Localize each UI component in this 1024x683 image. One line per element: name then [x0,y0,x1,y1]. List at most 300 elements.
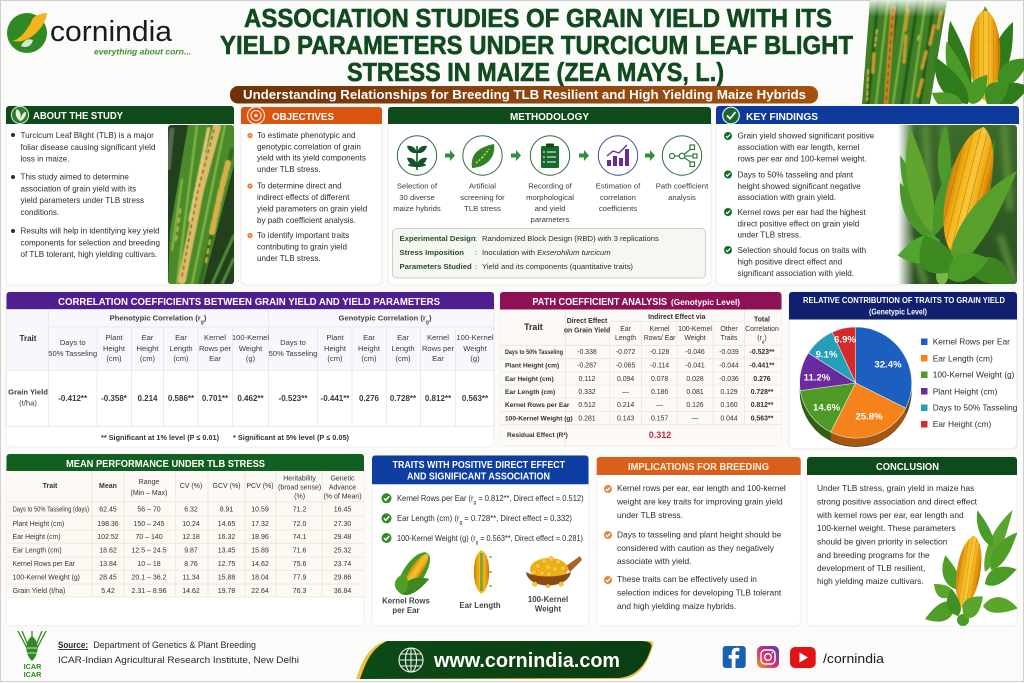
table: mean performance: 36.84 [334,588,351,595]
table: mean performance: CV (%) [180,483,202,490]
social links: /cornindia [823,651,885,666]
table: mean performance: Kernel Rows per Ear [13,561,76,568]
list: positive traits: Kernel Rows per Ear (rg = 0.812**, Direct effect = 0.512) [397,494,584,506]
legend: Ear Length (cm) [933,353,993,363]
table: mean performance: 14.65 [218,521,235,528]
text: implications bullets: considered with caution as they negatively [617,543,775,553]
arrow [445,150,455,161]
text: methodology step labels: Recording of [528,182,573,191]
text: conclusion: Under TLB stress, grain yield in maize has [817,483,974,493]
text: about bullets: yield parameters under TLB stress [20,196,144,205]
text: methodology step labels: TLB stress [464,204,501,213]
heading: key findings [716,106,1019,124]
panel: conclusion [807,457,1022,628]
heading: methodology [388,107,711,124]
table: correlation values: Days to [280,338,306,347]
pie chart: 11.2% [804,372,831,384]
table: correlation values: 100-Kernel [232,333,269,342]
image: blighted leaf [168,125,234,284]
table: correlation values: Rows per [199,344,232,353]
source text [58,639,299,665]
pie chart [800,327,912,447]
text: conclusion: with kernel rows per ear, ear length and [816,510,964,520]
text: about bullets: components for selection and breeding [20,238,160,248]
table: mean performance: 29.48 [334,534,351,541]
table: path coefficients: -0.072 [616,349,636,356]
table: mean performance: 16.32 [218,534,235,541]
table: correlation values: (cm) [395,354,411,363]
text: key findings bullets: association with ear length, kernel [738,143,860,152]
text: objectives bullets: To estimate phenotypic and [257,131,356,140]
text: about bullets: loss in maize. [20,154,70,164]
text: implications bullets: Kernel rows per ear, ear length and 100-kernel [617,483,786,493]
table: mean performance: 25.32 [334,548,351,554]
heading: about the study [6,106,234,124]
info box: experimental details: Randomized Block Design (RBD) with 3 replications [482,234,659,243]
arrow [511,150,521,161]
labels: trait icons: Ear Length [459,601,501,610]
icon: instagram [757,646,779,668]
table: path coefficients: Indirect Effect via [648,314,706,321]
heading: about the study: ABOUT THE STUDY [33,110,123,122]
text: key findings bullets: association with grain yield. [738,193,836,202]
list: positive traits: 100-Kernel Weight (g) (rg = 0.563**, Direct effect = 0.281) [397,534,583,546]
labels: trait icons: Weight [535,604,561,614]
table: correlation values: (t/ha) [19,398,37,408]
table: path coefficients: Total [754,316,770,324]
table: correlation values: 0.586** [168,394,195,403]
legend: Kernel Rows per Ear [933,337,1010,347]
table: correlation values: (cm) [140,354,156,363]
table: path coefficients: Other [720,326,738,333]
table: path coefficients: 0.312 [649,430,671,440]
text: conclusion [816,483,978,586]
table: path coefficients: 0.332 [578,389,596,396]
labels: trait icons: per Ear [392,606,420,615]
title: ASSOCIATION STUDIES OF GRAIN YIELD WITH ITS [244,5,832,33]
text: methodology step labels: screening for [460,193,505,202]
table: correlation values: Rows per [422,344,455,353]
text: about bullets: of TLB tolerant, high yielding cultivars. [20,250,157,259]
table: mean performance: Advance [329,484,356,492]
arrow [645,150,655,161]
text: methodology step labels: Path coefficient [656,182,709,191]
table: path coefficients: 0.081 [686,389,704,396]
text: about bullets: Turcicum Leaf Blight (TLB) is a major [20,131,154,140]
text: implications bullets: Days to tasseling and plant height should be [617,530,782,540]
panel: objectives [241,106,382,285]
panel: methodology [388,107,711,285]
heading: correlation coefficients: CORRELATION COEFFICIENTS BETWEEN GRAIN YIELD AND YIELD PARAMETERS [58,296,440,308]
logo: ICAR [18,631,46,679]
table: correlation values: Height [103,344,126,353]
table: path coefficients: 0.563** [751,416,774,422]
text: objectives bullets: yield with its yield components [257,154,366,162]
text: about bullets [11,131,160,259]
image: maize cob in field [898,125,1017,284]
table: mean performance: 14.62 [251,561,269,568]
table: correlation values: (cm) [327,354,343,363]
table: path coefficients: -0.287 [577,362,597,370]
table: path coefficients: — [692,416,699,422]
info box: experimental details: Stress Imposition [400,248,464,257]
subtitle banner: Understanding Relationships for Breeding TLB Resilient and High Yielding Maize Hybrids [243,87,806,102]
table: mean performance: 8.91 [220,507,233,514]
table: correlation values: 50% Tasseling [48,349,97,358]
table: path coefficients: Weight [684,335,706,342]
text: methodology step labels: coefficients [599,204,637,213]
heading: path coefficient analysis: PATH COEFFICIENT ANALYSIS [532,296,667,308]
legend: 100-Kernel Weight (g) [933,370,1015,380]
heading: implications [597,457,801,475]
text: objectives bullets: under TLB stress. [257,165,321,174]
table: correlation values: Height [324,344,347,353]
image: maize plant [925,510,1017,626]
text: conclusion: and breeding programs for the [817,550,930,560]
table: correlation values: Days to [60,338,86,347]
table: path coefficients: 0.276 [753,376,771,383]
heading: key findings: KEY FINDINGS [746,111,818,123]
table: path coefficients: 0.129 [720,389,738,396]
table: path coefficients: 0.186 [651,389,668,396]
table: correlation values: Length [169,344,193,353]
heading: relative contribution: RELATIVE CONTRIBUTION OF TRAITS TO GRAIN YIELD [803,295,1005,305]
text: methodology step labels: analysis [668,193,696,202]
heading: objectives: OBJECTIVES [272,111,334,123]
legend [921,337,1018,429]
table: path coefficients: 0.214 [617,402,634,409]
text: conclusion: high yielding maize cultivars. [817,576,924,586]
heading: mean performance [6,454,364,471]
text: methodology step labels: 30 diverse [399,193,435,202]
info box: experimental details: : [475,262,477,271]
table: correlation values: -0.523** [279,394,308,403]
website banner [356,641,653,679]
heading: path coefficient analysis: (Genotypic Level) [671,297,740,307]
table: path coefficients: Ear Height (cm) [505,376,554,383]
logo: ICAR: ICAR [24,670,42,679]
table: mean performance: GCV (%) [212,483,240,490]
table: correlation values: Grain Yield [8,388,48,396]
table: mean performance: Range [139,479,159,486]
text: key findings bullets: Grain yield showed significant positive [738,132,875,141]
heading: relative contribution: (Genetypic Level) [869,306,927,316]
table: mean performance: 12.18 [182,534,200,541]
table: path coefficients: -0.046 [685,349,705,356]
table: mean performance: 10 – 18 [137,561,161,568]
table: mean performance: 13.45 [218,548,235,554]
heading: mean performance: MEAN PERFORMANCE UNDER TLB STRESS [66,458,265,470]
table: path coefficients: Ear [620,326,632,333]
table: mean performance: 29.86 [334,574,351,582]
logo: cornindia: cornindia [50,16,172,48]
table: mean performance: 2.31 – 8.96 [131,588,167,595]
panel: path coefficient analysis [500,292,782,446]
panel: traits with positive direct effect [372,456,588,626]
table: path coefficients: Trait [524,322,543,332]
list: positive traits: Ear Length (cm) (rg = 0.728**, Direct effect = 0.332) [397,514,572,526]
text: implications bullets [604,483,786,611]
table: mean performance: 12.75 [218,561,235,568]
heading: correlation coefficients [6,292,494,310]
table: mean performance: Ear Length (cm) [13,548,62,554]
table: correlation values: Weight [463,344,488,353]
table: path coefficients: Ear Length (cm) [505,389,555,396]
table: mean performance: 5.42 [101,588,115,595]
table: path coefficients: 0.281 [578,416,596,422]
heading: relative contribution [789,292,1017,320]
table: mean performance: 56 – 70 [137,507,161,514]
table: mean performance: Plant Height (cm) [13,521,64,528]
table: path coefficients: 0.512 [578,402,596,409]
text: conclusion: development of TLB resilient, [817,563,925,573]
table: path coefficients: Kernel Rows per Ear [505,402,570,409]
labels: trait icons: 100-Kernel [528,595,568,604]
table: correlation values: (cm) [173,354,189,363]
table: mean performance: 9.87 [184,548,198,554]
table: path coefficients: 0.078 [651,376,668,383]
table: mean performance: 100-Kernel Weight (g) [13,574,80,582]
table: path coefficients: (rg) [757,335,767,344]
table: mean performance: (broad sense) [278,484,321,492]
table: path coefficients: 0.044 [720,416,738,422]
text: objectives bullets: by path coefficient analysis. [257,216,356,225]
table: path coefficients: Length [615,335,636,342]
image: maize cob header [932,6,1024,104]
table: path coefficients: 0.812** [751,402,774,409]
text: methodology step labels: Artificial [469,182,496,191]
text: methodology step labels: morphological [526,193,574,202]
table: path coefficients: -0.044 [719,362,739,370]
heading: conclusion [807,457,1017,475]
table: mean performance: 28.45 [99,574,117,582]
info box: experimental details: Yield and its components (quantitative traits) [482,262,633,271]
table: correlation values: Ear [175,333,187,342]
text: implications bullets: and high yielding maize hybrids. [617,601,736,611]
text: methodology step labels: Selection of [397,182,438,191]
text: about bullets: conditions. [20,208,59,217]
table: mean performance: 15.88 [218,574,235,582]
info box: experimental details [392,228,706,278]
text: implications bullets: These traits can be effectively used in [617,574,757,584]
table: path coefficients: 0.157 [651,416,668,422]
table: mean performance: 6.32 [184,507,198,514]
pie chart: 32.4% [874,360,902,370]
text: objectives bullets: To determine direct and [257,182,342,190]
table: mean performance: 8.76 [184,561,198,568]
text: objectives bullets: contributing to grain yield [257,242,347,252]
icon: ear length cob [474,550,492,594]
icon: globe [399,648,423,672]
table: mean performance: Grain Yield (t/ha) [13,588,65,595]
table: path coefficients: on Grain Yield [564,328,610,334]
logo: cornindia [7,13,191,56]
logo: cornindia: everything about corn... [94,46,191,56]
table: mean performance: Days to 50% Tasseling (days) [13,507,89,514]
legend: Days to 50% Tasseling [933,403,1018,413]
text: key findings bullets: under TLB stress. [738,230,801,240]
table: path coefficients: Days to 50% Tasseling [505,349,563,356]
text: about bullets: association of grain yield with its [20,184,136,194]
table: path coefficients: -0.128 [650,349,670,356]
table: path coefficients: -0.114 [650,362,669,370]
text: about bullets: This study aimed to determine [20,172,129,182]
heading: conclusion: CONCLUSION [876,461,939,473]
website banner: www.cornindia.com [433,650,620,672]
table: mean performance: 23.74 [334,561,351,568]
text: methodology step labels [393,182,709,224]
table: correlation values: Kernel [427,333,449,342]
table: correlation values: (g) [470,354,480,363]
logo: ICAR: ICAR [24,662,42,671]
panel: implications for breeding [597,457,801,626]
table: mean performance: 27.30 [334,521,351,528]
table: correlation values: Ear [432,354,444,363]
table: mean performance: 14.62 [182,588,200,595]
table: mean performance: Ear Height (cm) [13,534,61,541]
table: mean performance: 22.64 [251,588,269,595]
table: correlation values: Weight [239,344,263,353]
text: methodology step labels: maize hybrids [393,204,441,213]
table: path coefficients: — [656,402,663,409]
table: path coefficients: Traits [721,335,738,342]
heading: traits: AND SIGNIFICANT ASSOCIATION [407,470,550,482]
table: correlation values: Phenotypic Correlation (rg) [110,314,207,326]
panel: key findings [716,106,1024,293]
table: mean performance: 150 – 245 [133,521,165,528]
icon: correlation chart [598,136,638,175]
table: mean performance: 70 – 140 [135,534,163,541]
table: mean performance: 75.6 [293,561,307,568]
source text: Department of Genetics & Plant Breeding [93,639,256,650]
table: mean performance: 18.62 [99,548,117,554]
table: correlation values: Plant [326,333,345,342]
icon: facebook [723,646,746,668]
table: path coefficients: -0.338 [577,349,597,356]
table: mean performance: 19.78 [218,588,235,595]
table: path coefficients: Kernel [650,326,670,333]
table: mean performance: 20.1 – 36.2 [131,574,167,582]
heading: path coefficient analysis [500,292,782,310]
table: correlation values: (g) [246,354,256,363]
table: correlation values: 0.214 [137,394,158,403]
table: correlation values: -0.412** [58,394,88,403]
table: correlation values: Height [137,344,159,353]
table: correlation values: 50% Tasseling [269,349,317,358]
table: correlation values: (cm) [106,354,122,363]
text: key findings bullets: Kernel rows per ear had the highest [738,208,866,217]
text: key findings bullets: direct positive effect on grain yield [738,220,859,228]
icon: recording clipboard [530,136,570,175]
labels: trait icons [382,595,568,615]
table: correlation values: 0.276 [359,394,380,403]
table: mean performance [6,471,364,597]
pie chart: 25.8% [855,412,883,422]
text: about bullets: Results will help in identifying key yield [20,226,160,236]
table: mean performance: 71.6 [293,548,307,554]
text: key findings bullets: Days to 50% tasseling and plant [738,170,854,180]
table: mean performance: (Min – Max) [131,490,167,497]
table: mean performance: (%) [294,494,305,500]
table: mean performance: 74.1 [293,534,307,541]
heading: traits: TRAITS WITH POSITIVE DIRECT EFFECT [393,459,565,471]
table: path coefficients: -0.041 [685,362,705,370]
info box: experimental details: Inoculation with Exserohilum turcicum [482,248,611,257]
table: path coefficients: 0.728** [751,389,774,396]
icon: plant selection [397,136,437,175]
table: correlation values: Ear [209,354,221,363]
table: mean performance: 77.9 [293,574,307,582]
table: path coefficients: 0.094 [617,376,634,383]
table: correlation values: Kernel [204,333,226,342]
heading: methodology: METHODOLOGY [510,111,589,123]
table: mean performance: 10.24 [182,521,200,528]
text: objectives bullets: genotypic correlation of grain [257,142,361,152]
table: mean performance: 17.32 [251,521,269,528]
heading: traits [372,456,588,484]
table: path coefficients: Correlation [745,326,779,333]
text: key findings bullets: height showed significant negative [738,182,861,191]
table: correlation values [6,310,494,426]
table: mean performance: 198.36 [97,521,119,528]
note: significance levels [101,433,349,442]
info box: experimental details: Parameters Studied [400,262,472,271]
icon: youtube [790,647,816,668]
table: mean performance: 10.59 [251,507,269,514]
table: mean performance: 13.84 [99,561,117,568]
note: significance levels: ** Significant at 1% level (P ≤ 0.01) [101,433,219,442]
text: key findings bullets: Selection should focus on traits with [738,246,866,255]
icon: leaf screening [463,136,502,175]
icon: kernel bowl [526,556,582,588]
text: conclusion: should be given priority in selection [817,536,948,546]
text: key findings bullets [724,132,875,278]
table: correlation values: 0.462** [237,394,265,403]
title [220,5,853,87]
table: path coefficients: -0.039 [719,349,739,356]
image: infected maize leaf [860,0,950,104]
table: correlation values: -0.441** [321,394,350,403]
panel: about the study [6,106,234,285]
table: path coefficients: 0.126 [686,402,704,409]
table: correlation values: Trait [20,334,37,343]
text: implications bullets: weight are key traits for improving grain yield [616,496,783,506]
table: correlation values: -0.358* [101,394,128,403]
arrow [579,150,589,161]
table: path coefficients: 0.112 [579,376,596,383]
text: conclusion: 100-kernel weight. These parameters [817,523,956,533]
icon: kernel rows cob [392,547,436,599]
text: implications bullets: under TLB stress. [617,510,683,520]
table: correlation values: 0.812** [425,394,452,403]
panel: correlation coefficients [6,292,494,447]
table: path coefficients: 100-Kernel [678,326,712,333]
text: key findings bullets: high positive direct effect and [738,258,842,266]
text: implications bullets: associate with yield. [617,556,691,566]
labels: trait icons: Kernel Rows [382,596,431,606]
table: path coefficients: Direct Effect [567,318,608,325]
text: objectives bullets: To identify important traits [257,231,349,240]
table: correlation values: Height [358,344,381,353]
table: mean performance: 18.04 [251,574,269,582]
table: path coefficients: Residual Effect (R²) [507,432,568,439]
text: objectives bullets: indirect effects of different [257,193,350,202]
info box: experimental details: Experimental Design [400,234,476,243]
table: mean performance: Trait [43,483,58,490]
table: correlation values: Ear [397,333,409,342]
table: correlation values: (cm) [361,354,377,363]
table: path coefficients [500,310,782,446]
